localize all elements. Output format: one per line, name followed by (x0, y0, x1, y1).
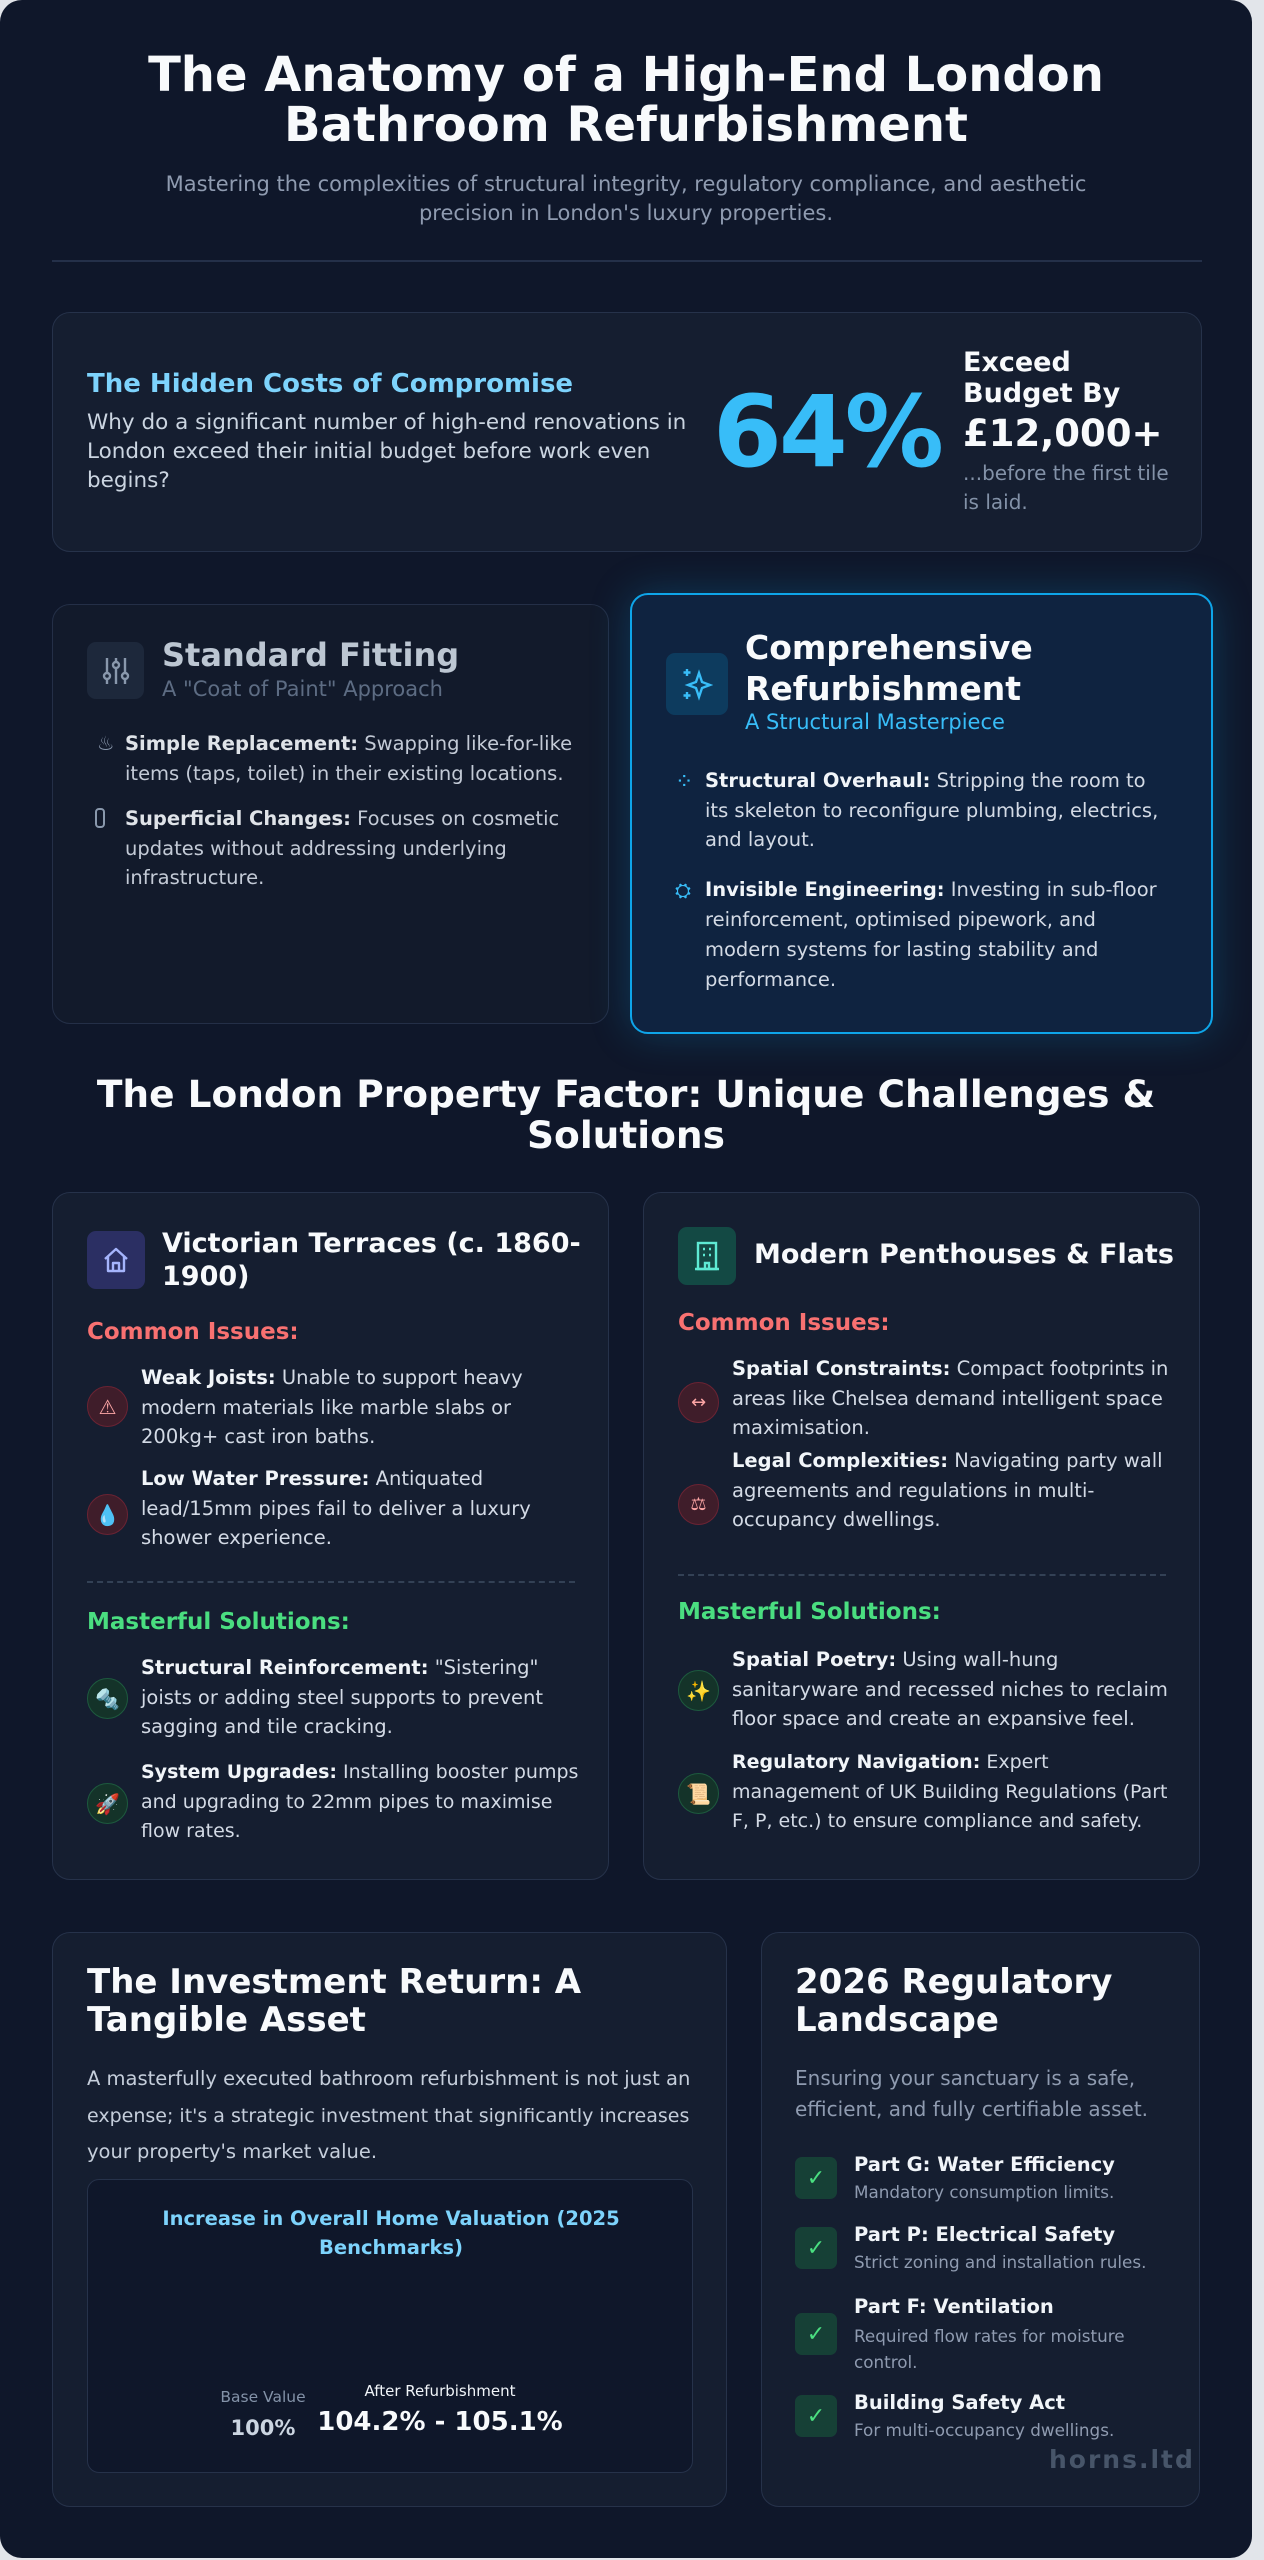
item: regulatory navigation (678, 1751, 1168, 1832)
item: low water pressure: Low Water Pressure: Antiquated (141, 1467, 483, 1490)
item: system upgrades: flow rates. (141, 1820, 241, 1842)
stat detail (963, 347, 1169, 514)
heading: investment return: Tangible Asset (87, 2000, 366, 2040)
item: structural reinforcement (87, 1656, 543, 1738)
item: building safety act: Building Safety Act (854, 2391, 1065, 2414)
item: part g: Mandatory consumption limits. (854, 2182, 1114, 2202)
icon: sparkle (666, 653, 728, 715)
label: base value: 100% (231, 2416, 295, 2440)
item: simple replacement: items (taps, toilet) in their existing locations. (125, 762, 564, 784)
item: superficial changes: updates without addressing underlying (125, 836, 507, 860)
item: low water pressure: shower experience. (141, 1526, 332, 1549)
subheading: A "Coat of Paint" Approach (162, 677, 443, 701)
item: superficial changes: infrastructure. (125, 866, 264, 889)
icon: building (678, 1227, 736, 1285)
item: spatial poetry (678, 1648, 1168, 1730)
stat detail: ...before the first tile (963, 461, 1169, 485)
heading: comprehensive refurbishment: Comprehensive (745, 628, 1033, 667)
item: structural overhaul (675, 769, 1158, 851)
label: common issues: Common Issues: (678, 1310, 890, 1336)
subtitle: Mastering the complexities of structural integrity, regulatory compliance, and aesthetic precision in London's luxury properties. (166, 172, 1086, 225)
item: invisible engineering (675, 878, 1157, 991)
heading: regulatory: 2026 Regulatory (795, 1962, 1112, 2002)
panel: comprehensive refurbishment (630, 593, 1213, 1034)
item: part p: ✓ (807, 2236, 825, 2260)
item: spatial constraints (678, 1357, 1168, 1439)
heading: regulatory (795, 1962, 1112, 2040)
item: system upgrades: and upgrading to 22mm pipes to maximise (141, 1790, 552, 1812)
label: after refurbishment (317, 2382, 563, 2437)
item: spatial constraints: areas like Chelsea demand intelligent space (732, 1386, 1163, 1410)
panel: regulatory landscape (761, 1932, 1200, 2507)
chart title: Benchmarks) (319, 2236, 463, 2259)
heading: hidden costs: The Hidden Costs of Compromise (87, 369, 573, 399)
item: building safety act: For multi-occupancy dwellings. (854, 2420, 1114, 2440)
panel: comprehensive refurbishment: ⁘ (675, 770, 693, 795)
label: after refurbishment: 104.2% - 105.1% (317, 2407, 563, 2437)
item: legal complexities: occupancy dwellings. (732, 1508, 941, 1531)
item: system upgrades (87, 1761, 578, 1842)
icon: house (87, 1231, 145, 1289)
item: spatial poetry: floor space and create an expansive feel. (732, 1707, 1135, 1730)
item: simple replacement (97, 732, 572, 784)
item: low water pressure: 💧 (95, 1502, 120, 1526)
item: spatial constraints: Spatial Constraints: Compact footprints in (732, 1357, 1168, 1380)
item: regulatory navigation: 📜 (686, 1782, 711, 1806)
item: superficial changes (95, 807, 559, 889)
item: structural reinforcement: Structural Reinforcement: "Sistering" (141, 1656, 538, 1679)
item: weak joists: 200kg+ cast iron baths. (141, 1425, 375, 1448)
panel: standard fitting (52, 604, 609, 1024)
text: investment body (87, 2067, 690, 2163)
item: part g: ✓ (807, 2166, 825, 2190)
item: system upgrades: 🚀 (95, 1792, 120, 1816)
item: part f: Part F: Ventilation (854, 2295, 1054, 2318)
item: part g: Part G: Water Efficiency (854, 2153, 1115, 2176)
subheading: A Structural Masterpiece (745, 710, 1005, 734)
item: structural overhaul: Structural Overhaul: Stripping the room to (705, 769, 1146, 792)
item: invisible engineering: reinforcement, optimised pipework, and (705, 908, 1096, 931)
item: weak joists: modern materials like marble slabs or (141, 1396, 511, 1418)
item: part f: ✓ (807, 2322, 825, 2346)
item: regulatory navigation: F, P, etc.) to ensure compliance and safety. (732, 1810, 1142, 1832)
item: legal complexities: ⚖ (690, 1494, 707, 1515)
section heading: london property factor: The London Property Factor: Unique Challenges & (97, 1072, 1155, 1116)
item: part p: Strict zoning and installation rules. (854, 2252, 1146, 2272)
item: spatial constraints: ↔ (691, 1392, 706, 1413)
text: investment body: your property's market value. (87, 2140, 377, 2163)
panel: investment return (52, 1932, 727, 2507)
item: simple replacement: Simple Replacement: Swapping like-for-like (125, 732, 572, 755)
item: part f: Required flow rates for moisture control. (854, 2326, 1125, 2372)
heading: investment return (87, 1962, 581, 2040)
item: legal complexities: agreements and regulations in multi- (732, 1478, 1094, 1502)
item: structural overhaul: its skeleton to reconfigure plumbing, electrics, (705, 798, 1158, 822)
label: masterful solutions: Masterful Solutions: (87, 1609, 350, 1635)
heading: investment return: The Investment Return: A (87, 1962, 581, 2002)
label: masterful solutions: Masterful Solutions: (678, 1599, 941, 1625)
item: weak joists: Weak Joists: Unable to support heavy (141, 1366, 523, 1389)
heading: modern: Modern Penthouses & Flats (754, 1239, 1174, 1270)
title: The Anatomy of a High-End London (148, 47, 1104, 103)
heading: regulatory: Landscape (795, 2000, 999, 2040)
item: structural reinforcement: sagging and tile cracking. (141, 1715, 393, 1738)
item: spatial poetry: ✨ (686, 1678, 711, 1702)
panel: victorian terraces (52, 1192, 609, 1880)
panel: hidden costs (52, 312, 1202, 552)
heading: standard fitting: Standard Fitting (162, 636, 459, 674)
label: common issues: Common Issues: (87, 1319, 299, 1345)
item: part f (795, 2295, 1125, 2372)
item: regulatory navigation: Regulatory Navigation: Expert (732, 1751, 1049, 1773)
stat: 64%: 64% (713, 375, 941, 490)
watermark: horns.ltd (1049, 2445, 1195, 2474)
item: structural reinforcement: 🔩 (95, 1686, 120, 1710)
item: low water pressure (87, 1467, 531, 1549)
item: legal complexities (678, 1449, 1163, 1531)
label: base value: Base Value (220, 2388, 306, 2406)
item: part p (795, 2223, 1146, 2272)
stat detail: £12,000+ (963, 412, 1163, 455)
item: invisible engineering: Invisible Engineering: Investing in sub-floor (705, 878, 1157, 901)
item: spatial poetry: sanitaryware and recessed niches to reclaim (732, 1678, 1168, 1700)
item: invisible engineering: modern systems for lasting stability and (705, 938, 1098, 961)
item: legal complexities: Legal Complexities: Navigating party wall (732, 1449, 1163, 1472)
item: system upgrades: System Upgrades: Installing booster pumps (141, 1761, 578, 1783)
chart: home valuation (87, 2179, 693, 2473)
panel: standard fitting: ♨ (97, 732, 114, 755)
item: structural reinforcement: joists or adding steel supports to prevent (141, 1686, 543, 1708)
section heading: london property factor (97, 1072, 1155, 1157)
item: regulatory navigation: management of UK Building Regulations (Part (732, 1780, 1168, 1802)
heading: comprehensive refurbishment (745, 628, 1033, 708)
title (148, 47, 1104, 153)
item: weak joists (87, 1366, 523, 1448)
item: superficial changes: Superficial Changes: Focuses on cosmetic (125, 807, 559, 830)
section heading: london property factor: Solutions (527, 1113, 725, 1157)
panel: comprehensive refurbishment: ⛭ (675, 878, 691, 902)
stat detail: is laid. (963, 490, 1028, 514)
chart title: Increase in Overall Home Valuation (2025 (162, 2207, 620, 2230)
heading: victorian: 1900) (162, 1261, 250, 1292)
panel: modern penthouses (643, 1192, 1200, 1880)
item: weak joists: ⚠ (99, 1394, 116, 1418)
label: after refurbishment: After Refurbishment (365, 2382, 515, 2400)
item: structural overhaul: and layout. (705, 828, 815, 851)
item: low water pressure: lead/15mm pipes fail to deliver a luxury (141, 1496, 531, 1520)
heading: victorian (162, 1228, 581, 1292)
heading: victorian: Victorian Terraces (c. 1860- (162, 1228, 581, 1259)
item: invisible engineering: performance. (705, 968, 836, 991)
item: spatial poetry: Spatial Poetry: Using wall-hung (732, 1648, 1058, 1671)
stat detail: Exceed (963, 347, 1071, 378)
item: part g (795, 2153, 1115, 2202)
item: spatial constraints: maximisation. (732, 1416, 870, 1439)
chart title (162, 2207, 620, 2259)
title: Bathroom Refurbishment (284, 97, 968, 153)
heading: comprehensive refurbishment: Refurbishment (745, 669, 1021, 708)
icon: sliders (87, 642, 144, 699)
item: part p: Part P: Electrical Safety (854, 2223, 1115, 2246)
stat detail: Budget By (963, 378, 1120, 409)
text: investment body: A masterfully executed bathroom refurbishment is not just an (87, 2067, 690, 2090)
text: regulatory body: Ensuring your sanctuary is a safe, efficient, and fully certifiable asset. (795, 2066, 1148, 2121)
label: base value (220, 2388, 306, 2440)
item: building safety act: ✓ (807, 2404, 825, 2428)
text: investment body: expense; it's a strategic investment that significantly increases (87, 2104, 689, 2126)
text: hidden costs question: Why do a significant number of high-end renovations in London exceed their initial budget before work even begins? (87, 410, 686, 493)
item: building safety act (795, 2391, 1114, 2440)
